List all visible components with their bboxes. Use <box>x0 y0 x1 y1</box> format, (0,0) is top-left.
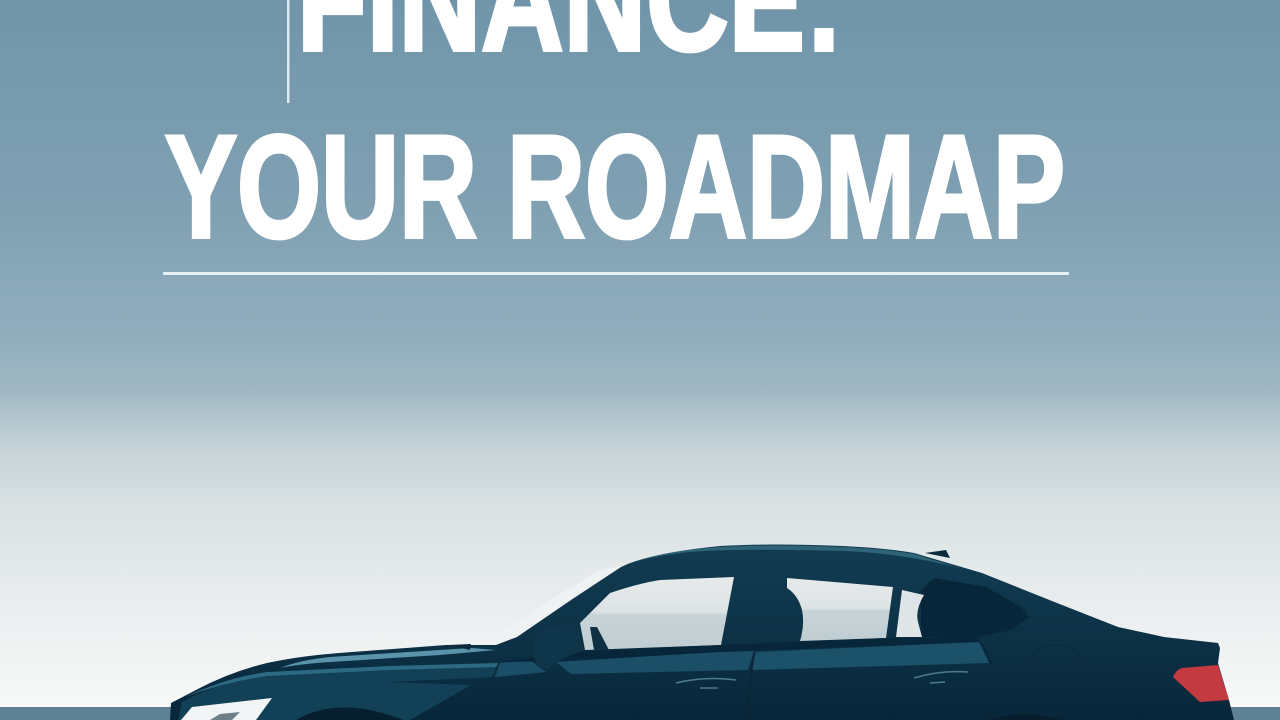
tail light <box>1173 665 1229 702</box>
title vertical rule <box>287 0 290 103</box>
windshield glare <box>484 565 625 647</box>
fender highlight <box>185 663 499 697</box>
roof rail highlight <box>625 546 960 568</box>
fender belt <box>496 660 546 677</box>
front wheel arch <box>296 708 403 720</box>
antenna <box>925 550 950 558</box>
headlight detail <box>210 712 240 720</box>
rear door highlight band <box>752 642 989 670</box>
rear wheel arch <box>990 714 1060 720</box>
front fender panel <box>178 664 499 720</box>
title underline <box>163 272 1069 275</box>
rear door handle <box>914 672 968 683</box>
headlight <box>181 698 272 720</box>
rear window <box>787 578 893 641</box>
hood highlight <box>280 648 496 668</box>
mirror stalk <box>590 627 609 650</box>
door seams <box>492 641 991 720</box>
small rear window <box>896 590 924 637</box>
front door handle <box>676 679 736 688</box>
wiper <box>449 644 471 650</box>
title <box>165 0 1065 268</box>
rear quarter dark window <box>921 578 1029 637</box>
window sill <box>500 637 979 662</box>
front door highlight band <box>556 651 754 674</box>
car illustration <box>170 544 1234 720</box>
fuel door <box>1031 645 1082 663</box>
road band <box>0 707 1280 720</box>
side mirror <box>533 625 583 670</box>
front window <box>580 577 734 650</box>
car body <box>170 544 1234 720</box>
